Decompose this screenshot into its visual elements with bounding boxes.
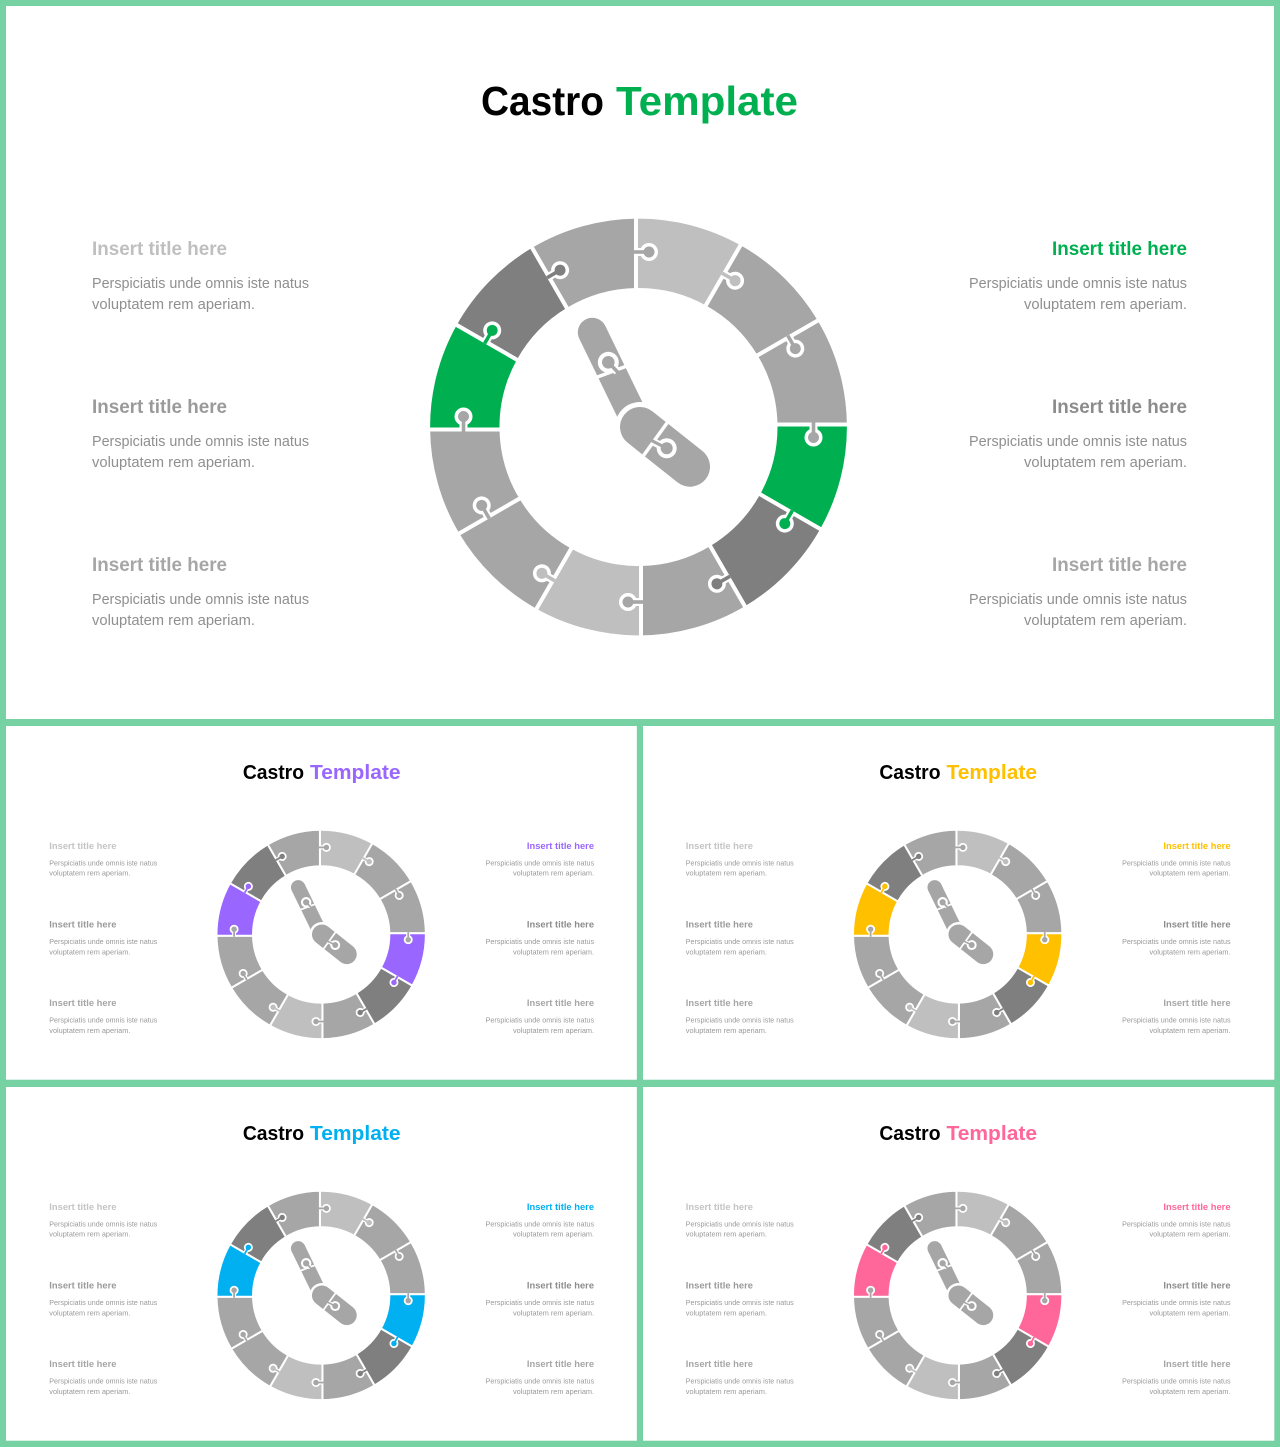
text blocks: left column: voluptatem rem aperiam. <box>49 1026 130 1035</box>
text blocks: left column: Insert title here <box>49 1359 116 1370</box>
text blocks: left column: Perspiciatis unde omnis iste natus <box>49 1219 158 1228</box>
text blocks: right column: voluptatem rem aperiam. <box>1149 1026 1231 1035</box>
text blocks: right column: voluptatem rem aperiam. <box>513 1026 594 1035</box>
icon: puzzle clock hands <box>578 318 690 467</box>
text block: right top <box>969 239 1187 313</box>
text block: left bottom: Insert title here <box>92 555 227 576</box>
text block: right middle: Insert title here <box>1052 397 1187 418</box>
text blocks: left column: Insert title here <box>686 919 753 930</box>
text blocks: left column: voluptatem rem aperiam. <box>49 869 130 878</box>
text blocks: right column: Insert title here <box>1163 1202 1231 1213</box>
text blocks: left column: voluptatem rem aperiam. <box>686 869 767 878</box>
text blocks: right column: Insert title here <box>1163 841 1231 852</box>
text blocks: right column: Insert title here <box>527 1280 594 1291</box>
text block: right bottom: Insert title here <box>1052 555 1187 576</box>
text blocks: left column: Perspiciatis unde omnis iste natus <box>49 1298 158 1307</box>
title: Castro <box>879 1123 941 1145</box>
panel: purple slide <box>6 726 637 1080</box>
title <box>879 762 1037 784</box>
title: Template <box>616 78 798 124</box>
text blocks: left column: voluptatem rem aperiam. <box>686 947 767 956</box>
text block: left middle: voluptatem rem aperiam. <box>92 454 255 471</box>
title <box>481 78 798 124</box>
text blocks: right column: Perspiciatis unde omnis iste natus <box>1122 1219 1231 1228</box>
text blocks: left column: Perspiciatis unde omnis iste natus <box>49 1016 158 1025</box>
text blocks: left column: Insert title here <box>49 1202 116 1213</box>
title: Template <box>310 762 401 784</box>
text blocks: left column: voluptatem rem aperiam. <box>686 1308 767 1317</box>
text block: right middle: Perspiciatis unde omnis iste natus <box>969 433 1187 450</box>
text blocks: left column <box>686 841 794 1035</box>
text blocks: right column: Perspiciatis unde omnis iste natus <box>486 1016 594 1025</box>
text blocks: right column: Insert title here <box>1163 998 1231 1009</box>
icon: puzzle clock hands <box>291 880 347 954</box>
text blocks: right column: Perspiciatis unde omnis iste natus <box>486 1377 594 1386</box>
text blocks: right column: Perspiciatis unde omnis iste natus <box>486 858 594 867</box>
text block: left top: Insert title here <box>92 239 227 260</box>
text blocks: left column: Perspiciatis unde omnis iste natus <box>686 1219 794 1228</box>
text blocks: right column: Perspiciatis unde omnis iste natus <box>1122 937 1231 946</box>
panel: pink slide <box>643 1087 1274 1441</box>
panel: main green slide <box>6 6 1274 719</box>
panel: blue slide <box>6 1087 637 1441</box>
puzzle ring chart <box>841 1179 1074 1412</box>
text blocks: right column: Insert title here <box>527 919 594 930</box>
text blocks: right column <box>1122 841 1231 1035</box>
text blocks: right column: voluptatem rem aperiam. <box>513 1387 594 1396</box>
text blocks: right column: Insert title here <box>527 1202 594 1213</box>
text block: left middle: Perspiciatis unde omnis iste natus <box>92 433 309 450</box>
panel: yellow slide <box>643 726 1274 1080</box>
title: Template <box>310 1123 401 1145</box>
text blocks: left column: Perspiciatis unde omnis iste natus <box>686 937 794 946</box>
text blocks: left column <box>49 1202 158 1396</box>
text blocks: right column: Insert title here <box>1163 1359 1231 1370</box>
text block: left bottom <box>92 555 309 629</box>
text blocks: right column: Insert title here <box>527 1359 594 1370</box>
text blocks: left column: Insert title here <box>686 1359 753 1370</box>
text blocks: right column: Perspiciatis unde omnis iste natus <box>486 937 594 946</box>
puzzle ring chart <box>205 818 437 1051</box>
text blocks: right column: Perspiciatis unde omnis iste natus <box>1122 1016 1231 1025</box>
text block: left middle <box>92 397 309 471</box>
text blocks: right column: Insert title here <box>1163 919 1231 930</box>
text blocks: left column: Insert title here <box>686 1280 753 1291</box>
text block: left bottom: Perspiciatis unde omnis iste natus <box>92 591 309 608</box>
icon: puzzle clock hands <box>927 1241 983 1315</box>
title: Castro <box>243 1123 304 1145</box>
text blocks: left column: Insert title here <box>49 919 116 930</box>
text blocks: left column: voluptatem rem aperiam. <box>49 947 130 956</box>
text block: right middle <box>969 397 1187 471</box>
text blocks: right column: voluptatem rem aperiam. <box>513 869 594 878</box>
text blocks: right column: voluptatem rem aperiam. <box>1149 869 1231 878</box>
title: Template <box>946 762 1037 784</box>
text blocks: left column: Perspiciatis unde omnis iste natus <box>686 858 794 867</box>
text blocks: left column: voluptatem rem aperiam. <box>49 1308 130 1317</box>
text blocks: left column: Perspiciatis unde omnis iste natus <box>49 937 158 946</box>
text blocks: left column: voluptatem rem aperiam. <box>686 1387 767 1396</box>
text block: right top: voluptatem rem aperiam. <box>1024 296 1187 313</box>
text blocks: right column: voluptatem rem aperiam. <box>513 947 594 956</box>
puzzle ring chart <box>841 818 1074 1051</box>
text blocks: right column: Perspiciatis unde omnis iste natus <box>486 1298 594 1307</box>
text blocks: left column: Perspiciatis unde omnis iste natus <box>686 1016 794 1025</box>
text blocks: left column: Perspiciatis unde omnis iste natus <box>686 1377 794 1386</box>
text block: right bottom: voluptatem rem aperiam. <box>1024 612 1187 629</box>
text block: right bottom: Perspiciatis unde omnis iste natus <box>969 591 1187 608</box>
text blocks: right column <box>486 841 594 1035</box>
title <box>879 1123 1037 1145</box>
text blocks: right column <box>1122 1202 1231 1396</box>
text blocks: left column: Insert title here <box>686 1202 753 1213</box>
text blocks: left column: Insert title here <box>686 841 753 852</box>
text blocks: left column: Perspiciatis unde omnis iste natus <box>686 1298 794 1307</box>
title: Template <box>946 1123 1037 1145</box>
text blocks: left column: Perspiciatis unde omnis iste natus <box>49 1377 158 1386</box>
text blocks: left column: voluptatem rem aperiam. <box>686 1026 767 1035</box>
text block: right bottom <box>969 555 1187 629</box>
text blocks: right column: Perspiciatis unde omnis iste natus <box>1122 1298 1231 1307</box>
text blocks: left column: Insert title here <box>49 998 116 1009</box>
text blocks: right column: voluptatem rem aperiam. <box>1149 1387 1231 1396</box>
text blocks: right column: voluptatem rem aperiam. <box>1149 1230 1231 1239</box>
icon: puzzle clock hands <box>291 1241 347 1315</box>
text block: left top <box>92 239 309 313</box>
text block: right top: Perspiciatis unde omnis iste natus <box>969 275 1187 292</box>
title <box>243 762 401 784</box>
puzzle ring chart <box>205 1179 437 1412</box>
text blocks: left column <box>686 1202 794 1396</box>
text block: right top: Insert title here <box>1052 239 1187 260</box>
title: Castro <box>879 762 941 784</box>
text blocks: right column: voluptatem rem aperiam. <box>1149 1308 1231 1317</box>
title: Castro <box>481 78 604 124</box>
puzzle ring chart <box>405 193 872 661</box>
text blocks: left column: voluptatem rem aperiam. <box>686 1230 767 1239</box>
text blocks: left column: voluptatem rem aperiam. <box>49 1230 130 1239</box>
text blocks: right column: voluptatem rem aperiam. <box>513 1230 594 1239</box>
text blocks: left column: voluptatem rem aperiam. <box>49 1387 130 1396</box>
text block: left top: voluptatem rem aperiam. <box>92 296 255 313</box>
text blocks: left column: Perspiciatis unde omnis iste natus <box>49 858 158 867</box>
text block: left middle: Insert title here <box>92 397 227 418</box>
text blocks: right column: voluptatem rem aperiam. <box>1149 947 1231 956</box>
text blocks: right column: Insert title here <box>1163 1280 1231 1291</box>
text blocks: right column: voluptatem rem aperiam. <box>513 1308 594 1317</box>
text block: left bottom: voluptatem rem aperiam. <box>92 612 255 629</box>
text blocks: right column <box>486 1202 594 1396</box>
text blocks: left column: Insert title here <box>49 1280 116 1291</box>
text blocks: right column: Insert title here <box>527 998 594 1009</box>
title: Castro <box>243 762 304 784</box>
text blocks: right column: Perspiciatis unde omnis iste natus <box>1122 1377 1231 1386</box>
text blocks: left column: Insert title here <box>49 841 116 852</box>
text blocks: right column: Insert title here <box>527 841 594 852</box>
text blocks: right column: Perspiciatis unde omnis iste natus <box>1122 858 1231 867</box>
title <box>243 1123 401 1145</box>
text blocks: left column <box>49 841 158 1035</box>
text block: right middle: voluptatem rem aperiam. <box>1024 454 1187 471</box>
text blocks: left column: Insert title here <box>686 998 753 1009</box>
text block: left top: Perspiciatis unde omnis iste natus <box>92 275 309 292</box>
text blocks: right column: Perspiciatis unde omnis iste natus <box>486 1219 594 1228</box>
icon: puzzle clock hands <box>927 880 983 954</box>
